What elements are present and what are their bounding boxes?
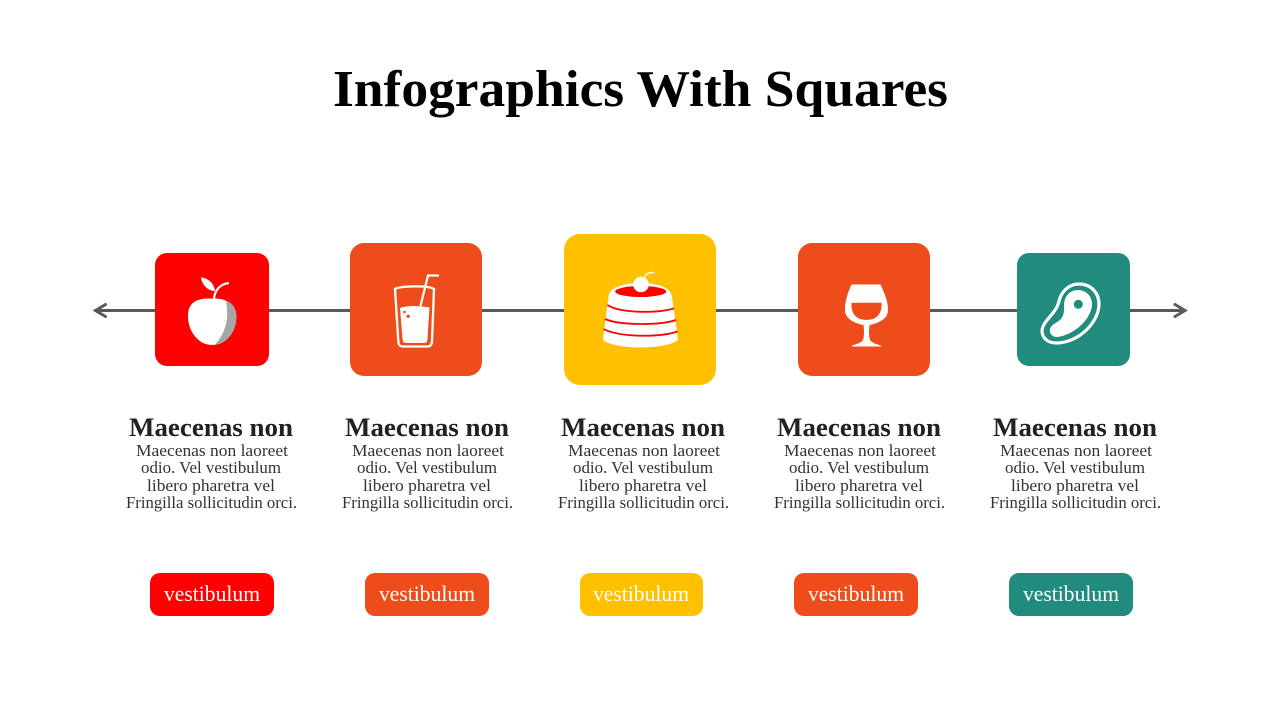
button: step 1 [150,573,274,616]
text block: step 2: Fringilla sollicitudin orci. [342,493,513,512]
text block: step 2: libero pharetra vel [363,476,491,495]
text block: step 1: Maecenas non laoreet [136,441,288,460]
button: step 5: vestibulum [1023,581,1119,606]
button: step 2 [365,573,489,616]
text block: step 5: Maecenas non [993,412,1157,442]
text block: step 2: odio. Vel vestibulum [357,458,497,477]
text block: step 3 [558,412,729,512]
text block: step 5: Fringilla sollicitudin orci. [990,493,1161,512]
text block: step 1: odio. Vel vestibulum [141,458,281,477]
icon: apple [188,278,236,345]
button: step 5 [1009,573,1133,616]
arrow: timeline [96,304,1185,316]
button: step 1: vestibulum [164,581,260,606]
icon: steak [1042,284,1099,343]
button: step 2: vestibulum [379,581,475,606]
panel: step 5 steak square [1017,253,1130,366]
text block: step 5: libero pharetra vel [1011,476,1139,495]
button: step 3 [580,573,703,616]
text block: step 4: Maecenas non [777,412,941,442]
text block: step 3: odio. Vel vestibulum [573,458,713,477]
text block: step 1: Fringilla sollicitudin orci. [126,493,297,512]
text block: step 5: Maecenas non laoreet [1000,441,1152,460]
text block: step 4 [774,412,945,512]
text block: step 4: odio. Vel vestibulum [789,458,929,477]
text block: step 1 [126,412,297,512]
text block: step 3: Maecenas non laoreet [568,441,720,460]
text block: step 5: odio. Vel vestibulum [1005,458,1145,477]
text block: step 3: libero pharetra vel [579,476,707,495]
text block: step 4: Maecenas non laoreet [784,441,936,460]
panel: step 1 apple square [155,253,269,366]
icon: juice glass [395,276,439,346]
panel: step 3 cake square [564,234,716,385]
text block: step 2: Maecenas non [345,412,509,442]
panel: step 2 drink square [350,243,482,376]
text block: step 2: Maecenas non laoreet [352,441,504,460]
panel: step 4 wine square [798,243,930,376]
text block: step 3: Maecenas non [561,412,725,442]
text block: step 3: Fringilla sollicitudin orci. [558,493,729,512]
text block: step 4: Fringilla sollicitudin orci. [774,493,945,512]
text block: step 1: libero pharetra vel [147,476,275,495]
text block: step 1: Maecenas non [129,412,293,442]
title: Infographics With Squares [333,61,948,118]
icon: wine glass [845,284,888,346]
button: step 4: vestibulum [808,581,904,606]
text block: step 2 [342,412,513,512]
button: step 4 [794,573,918,616]
text block: step 4: libero pharetra vel [795,476,923,495]
button: step 3: vestibulum [593,581,689,606]
text block: step 5 [990,412,1161,512]
icon: cake [603,272,678,348]
